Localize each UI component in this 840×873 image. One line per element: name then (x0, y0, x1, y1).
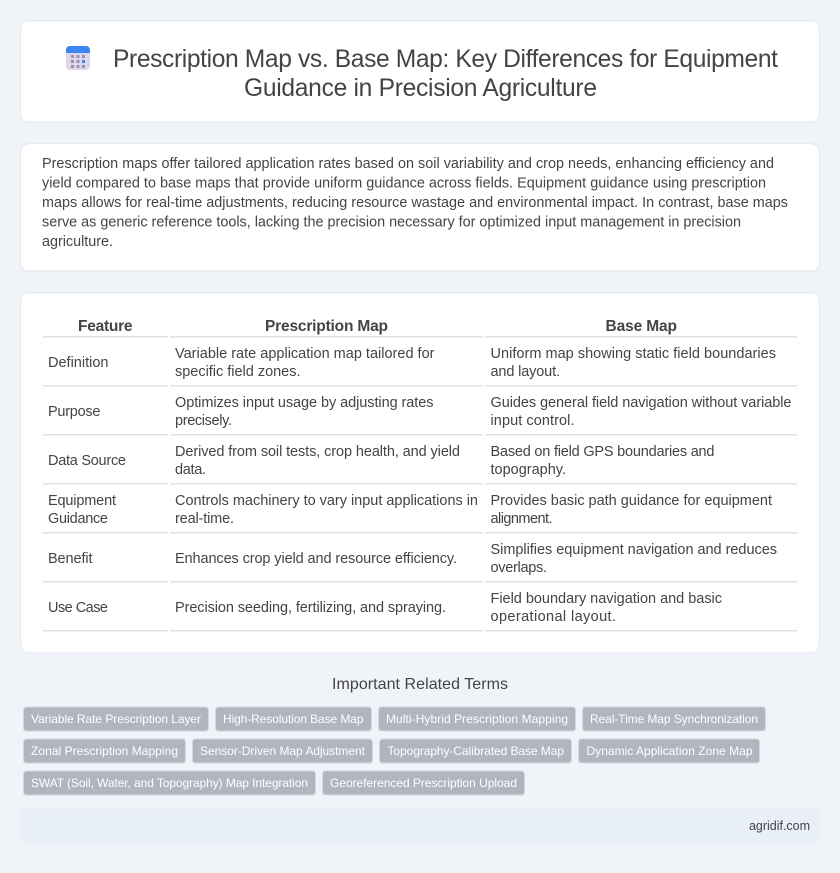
panel: intro paragraph (21, 144, 819, 271)
panel: comparison table (21, 293, 819, 653)
icon: calendar grid (66, 46, 90, 70)
tag: SWAT (Soil, Water, and Topography) Map Integration (31, 776, 308, 790)
panel: intro paragraph: maps allows for real-time adjustments, reducing resource wastage and environmental impact. In contrast, base maps (42, 195, 788, 211)
footer bar (20, 809, 820, 842)
row: purpose (48, 395, 792, 429)
row: definition: and layout. (490, 364, 560, 380)
row: data source: data. (175, 462, 206, 478)
tag: Multi-Hybrid Prescription Mapping (386, 712, 568, 726)
title: Guidance in Precision Agriculture (244, 75, 597, 102)
row: benefit: overlaps. (490, 560, 547, 576)
footer bar: agridif.com (749, 819, 810, 833)
tag: High-Resolution Base Map (223, 712, 364, 726)
row: definition: Definition (48, 355, 108, 371)
row: purpose: Purpose (48, 404, 100, 420)
panel: intro paragraph: serve as generic reference tools, lacking the precision necessary for optimized input management in precision (42, 214, 741, 230)
title (113, 46, 778, 102)
tag (582, 707, 766, 731)
panel: related term tags (24, 707, 766, 795)
tag: Variable Rate Prescription Layer (31, 712, 201, 726)
row: purpose: precisely. (175, 413, 232, 429)
row: data source: Based on field GPS boundaries and (490, 444, 714, 460)
row: benefit: Simplifies equipment navigation and reduces (490, 542, 777, 558)
tag (380, 739, 572, 763)
row: equipment guidance: Provides basic path guidance for equipment (490, 493, 772, 509)
panel: title header (21, 21, 819, 122)
row: use case: Use Case (48, 600, 108, 616)
row: equipment guidance: Controls machinery to vary input applications in (175, 493, 478, 509)
panel: intro paragraph: yield compared to base maps that provide uniform guidance across fields. Equipment guidance using prescription (42, 176, 766, 192)
row: data source: Derived from soil tests, crop health, and yield (175, 444, 460, 460)
row: data source: topography. (490, 462, 566, 478)
row: data source: Data Source (48, 453, 126, 469)
title: Prescription Map vs. Base Map: Key Differences for Equipment (113, 46, 778, 73)
tag (24, 771, 316, 795)
heading: related terms: Important Related Terms (332, 676, 508, 693)
row: use case: operational layout. (490, 609, 616, 625)
tag (216, 707, 372, 731)
row: definition: specific field zones. (175, 364, 300, 380)
row: benefit (48, 542, 777, 576)
tag (322, 771, 524, 795)
tag: Real-Time Map Synchronization (590, 712, 758, 726)
table header: Prescription Map (265, 318, 388, 335)
tag (24, 739, 186, 763)
tag (192, 739, 372, 763)
tag: Dynamic Application Zone Map (586, 744, 753, 758)
panel: intro paragraph: agriculture. (42, 234, 113, 250)
row: equipment guidance: Equipment (48, 493, 116, 509)
panel: intro paragraph: Prescription maps offer tailored application rates based on soil variability and crop needs, enhancing efficiency and (42, 156, 774, 172)
row: equipment guidance: Guidance (48, 511, 108, 527)
row: benefit: Enhances crop yield and resource efficiency. (175, 551, 457, 567)
row: equipment guidance (48, 493, 772, 527)
tag (24, 707, 208, 731)
row: data source (48, 444, 714, 478)
row: definition: Variable rate application map tailored for (175, 346, 435, 362)
row: definition (48, 346, 776, 380)
row: purpose: input control. (490, 413, 574, 429)
tag (378, 707, 576, 731)
tag: Sensor-Driven Map Adjustment (200, 744, 366, 758)
row: benefit: Benefit (48, 551, 92, 567)
row: equipment guidance: real-time. (175, 511, 234, 527)
row: definition: Uniform map showing static field boundaries (490, 346, 776, 362)
row: use case (48, 591, 722, 625)
table header: Base Map (606, 318, 677, 335)
row: use case: Precision seeding, fertilizing, and spraying. (175, 600, 446, 616)
tag: Zonal Prescription Mapping (31, 744, 178, 758)
tag: Topography-Calibrated Base Map (388, 744, 564, 758)
table header (78, 318, 677, 335)
row: equipment guidance: alignment. (490, 511, 552, 527)
row: purpose: Guides general field navigation without variable (490, 395, 792, 411)
row: purpose: Optimizes input usage by adjusting rates (175, 395, 434, 411)
row: use case: Field boundary navigation and basic (490, 591, 722, 607)
tag (578, 739, 760, 763)
tag: Georeferenced Prescription Upload (330, 776, 517, 790)
table header: Feature (78, 318, 133, 335)
